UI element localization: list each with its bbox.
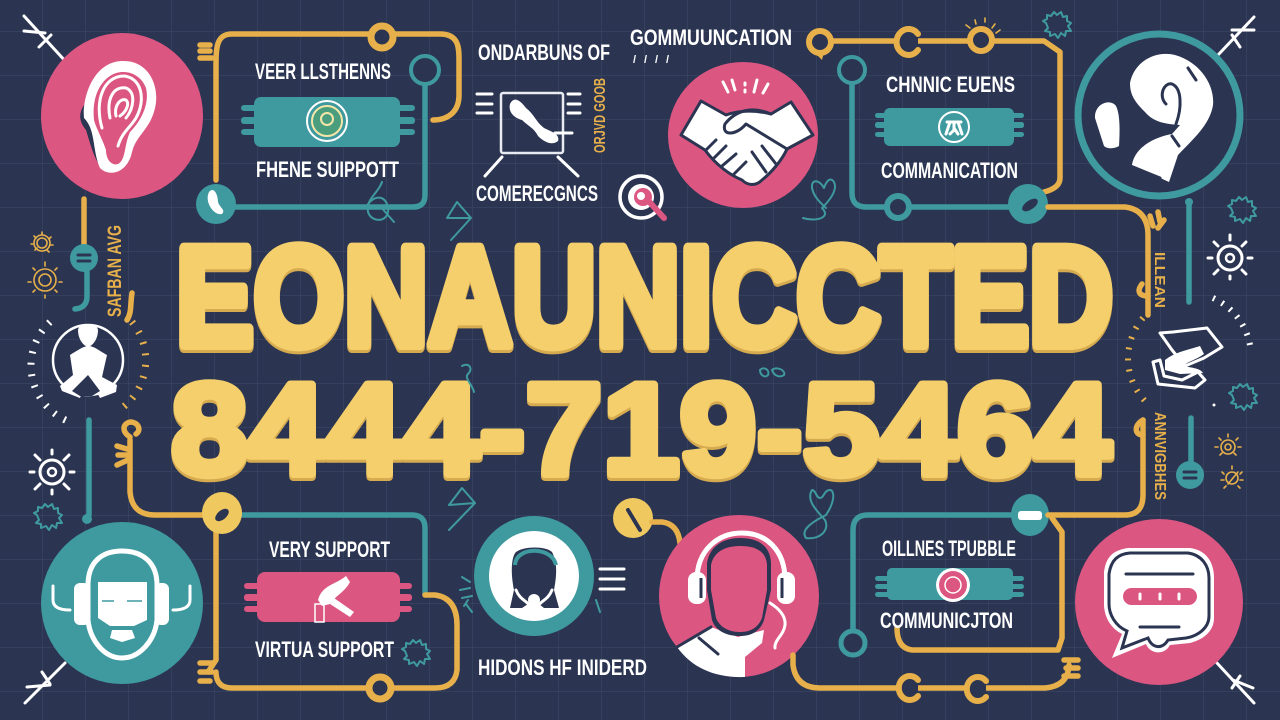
- teal bar: [1186, 204, 1192, 302]
- ring nodes: [899, 676, 986, 701]
- phone number: 8444-719-5464: [171, 356, 1111, 502]
- teal spikes: [460, 577, 600, 612]
- dashed ring: [1128, 298, 1250, 402]
- rays: [723, 80, 768, 93]
- large sun: [28, 262, 62, 298]
- hook: [127, 293, 132, 320]
- teal connector: [235, 84, 425, 207]
- dot: [1212, 404, 1216, 406]
- target icon: [620, 176, 664, 218]
- yellow check node: [613, 498, 653, 538]
- gear icon: [30, 450, 74, 494]
- leaf node: [202, 492, 242, 534]
- small sun: [31, 232, 53, 252]
- panel: bottom-centre headphones portrait: [659, 490, 833, 677]
- caption: VIRTUA SUPPORT: [255, 637, 394, 662]
- connector: [652, 522, 680, 543]
- dashed ring: [31, 322, 146, 422]
- slash marks: ////: [633, 54, 669, 66]
- pink banner: [244, 572, 412, 622]
- teal star: [1228, 197, 1256, 223]
- caption: FHENE SUIPPOTT: [256, 157, 399, 182]
- teal star: [1229, 384, 1257, 410]
- gear icon: [1208, 235, 1252, 279]
- side heading: GOMMUUNCATION: [630, 25, 792, 50]
- yellow hook connector: [130, 440, 205, 515]
- teal node: [70, 244, 98, 309]
- shoulders: [677, 627, 764, 677]
- teal star: [34, 504, 62, 530]
- caption: HIDONS HF INIDERD: [478, 655, 647, 680]
- panel: bottom-right card: [793, 420, 1143, 701]
- pill node: [1011, 494, 1049, 536]
- panel: top-left support card: [196, 26, 459, 224]
- yellow connector: [208, 530, 457, 688]
- banner: [875, 108, 1024, 146]
- heading: ONDARBUNS OF: [478, 40, 610, 65]
- teal pin node: [1176, 418, 1204, 489]
- vertical label: ILLEAN: [1151, 252, 1168, 308]
- vertical label: ANNVIGBHES: [1151, 412, 1168, 500]
- panel: bottom-left support card: [200, 488, 475, 699]
- teal ring node: [411, 56, 439, 84]
- ear icon: [1130, 54, 1213, 182]
- yellow connector: [216, 34, 459, 180]
- panel: handshake circle: [668, 62, 835, 220]
- cord: [770, 603, 785, 648]
- headset face icon: [53, 551, 190, 658]
- hands icon: [1153, 328, 1222, 388]
- teal connector: [852, 84, 1010, 207]
- heading: VERY SUPPORT: [269, 537, 390, 562]
- headphones: [697, 533, 785, 580]
- panel: top-right hearing circle: [1078, 17, 1254, 196]
- ring node: [369, 677, 391, 699]
- panel: bottom-left face circle: [25, 522, 203, 703]
- face and hair: [707, 538, 771, 636]
- panel: main title: [171, 218, 1113, 502]
- panel: right column icons: [1128, 197, 1257, 500]
- vertical label: SAFBAN AVG: [105, 225, 126, 317]
- earbud icon: [1095, 102, 1120, 148]
- panel: bottom-centre headset badge: [460, 498, 680, 680]
- doodle squiggles beside title: [462, 365, 784, 392]
- banner icon: [936, 568, 970, 602]
- panel: top-centre monitor block: [447, 25, 792, 240]
- person icon: [53, 324, 123, 398]
- teal star: [402, 640, 430, 666]
- chat bubble icon: [1104, 548, 1214, 658]
- yellow connectors: [1048, 420, 1143, 515]
- teal phone node: [196, 184, 236, 224]
- panel: bottom-right chat circle: [1075, 519, 1254, 703]
- teal connector: [243, 515, 425, 594]
- arrow doodle: [449, 488, 475, 530]
- banner icon: [307, 101, 347, 141]
- panel: left column icons: [28, 199, 205, 530]
- yellow ring node: [371, 26, 393, 48]
- monitor icon: [477, 93, 580, 176]
- ring nodes: [809, 18, 1000, 60]
- arrow doodle: [447, 202, 471, 240]
- banner icon: [315, 576, 354, 622]
- connector: [81, 199, 87, 245]
- banner icon: [939, 112, 969, 142]
- panel: top-left ear circle: [24, 16, 203, 199]
- side lines: [600, 569, 624, 589]
- teal bar: [86, 420, 92, 515]
- banner: [241, 97, 415, 147]
- handshake icon: [681, 101, 813, 184]
- banner: [875, 568, 1024, 600]
- vertical label: ORJVD GOOB: [592, 78, 609, 153]
- heading: VEER LLSTHENNS: [255, 59, 391, 84]
- leaf node: [1008, 184, 1048, 224]
- comb tick: [200, 45, 212, 58]
- yellow connector: [820, 41, 1060, 192]
- caption: COMMANICATION: [881, 158, 1018, 183]
- headset silhouette: [510, 548, 559, 608]
- small suns: [1215, 434, 1243, 488]
- heading: CHNNIC EUENS: [886, 72, 1015, 97]
- teal star: [1043, 12, 1071, 38]
- comb tick: [1064, 660, 1078, 676]
- panel: top-right card: [809, 12, 1164, 315]
- heading: OILLNES TPUBBLE: [882, 536, 1016, 561]
- teal connector: [853, 515, 1015, 630]
- pink message pill: [1123, 588, 1197, 605]
- heart doodle: [804, 490, 833, 538]
- comb tick: [200, 663, 212, 681]
- outgoing yellow connector: [1048, 207, 1148, 315]
- caption: COMERECGNCS: [476, 181, 598, 206]
- swirl: [368, 182, 394, 222]
- title line one: EONAUNICCTED: [176, 218, 1113, 374]
- caption: COMMUNICJTON: [880, 608, 1013, 633]
- heart doodle: [803, 180, 835, 220]
